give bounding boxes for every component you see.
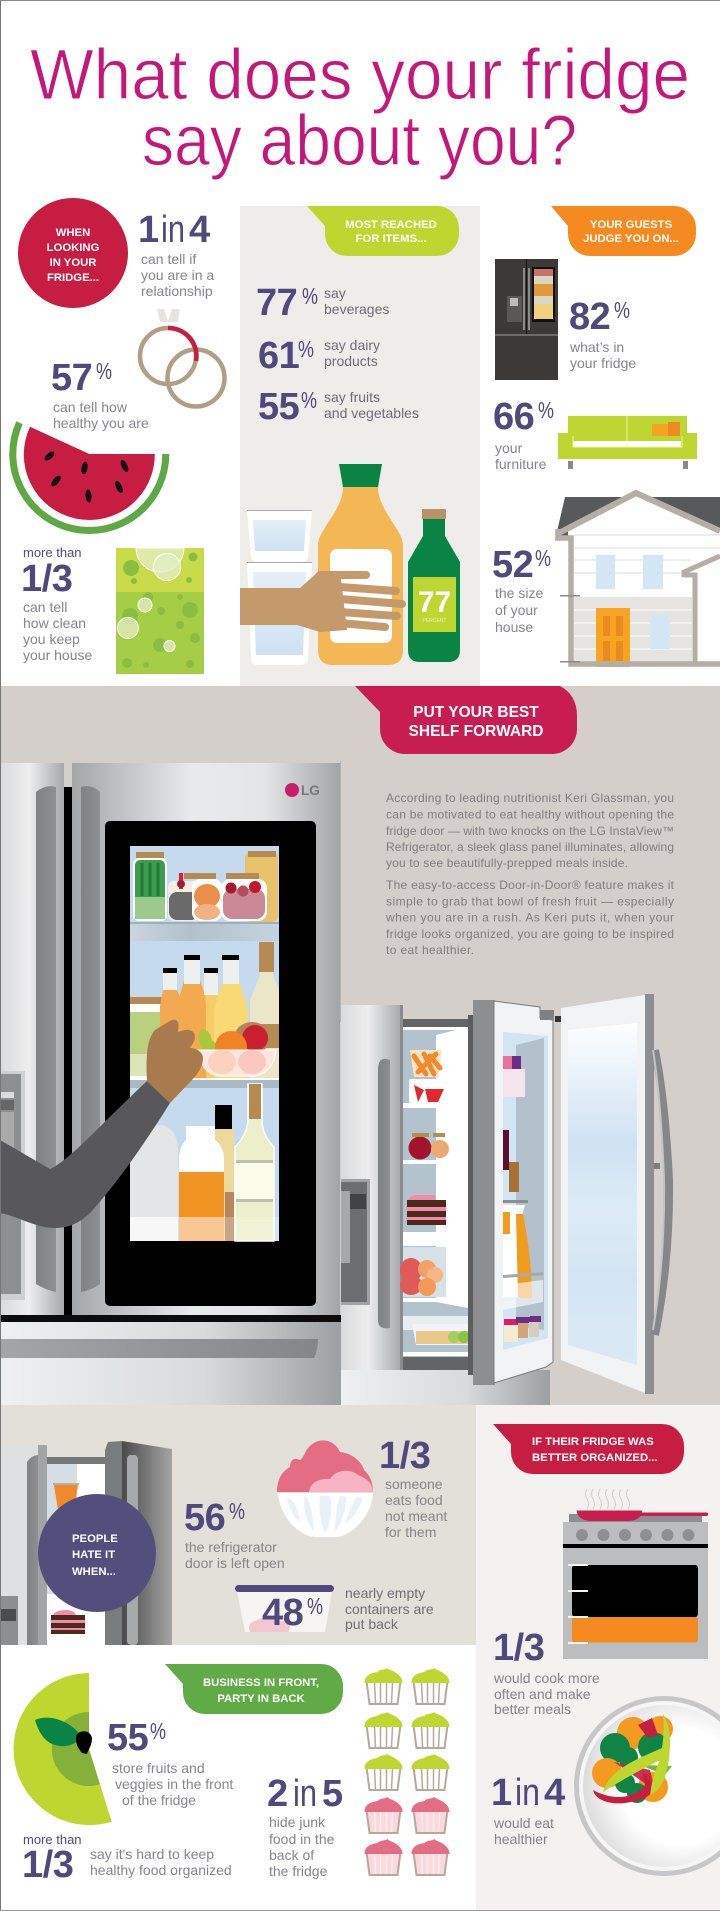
strawberries bbox=[409, 1079, 445, 1103]
arm in grey sleeve bbox=[0, 1081, 170, 1228]
top shelf jars bbox=[133, 851, 278, 922]
stat: 77% beverages: beverages bbox=[324, 301, 389, 317]
text block: nutritionist description: simple to grab that bowl of fresh fruit — especially bbox=[386, 894, 674, 908]
lower drawer bbox=[0, 1315, 550, 1405]
stat: 57% healthy: 57 bbox=[51, 357, 92, 399]
stat: 82% what's in your fridge: % bbox=[614, 297, 630, 323]
icon: green bottle with 77 percent: PERCENT bbox=[423, 618, 446, 624]
icon: green bottle with 77 percent: 77 bbox=[418, 586, 451, 619]
stat: 1 in 4 relationship: can tell if bbox=[141, 251, 196, 267]
stat: 1 in 4 relationship bbox=[138, 209, 214, 299]
callout: people hate it when: HATE IT bbox=[72, 1549, 115, 1561]
stat: 52% size of your house: house bbox=[495, 619, 533, 635]
stat: 56% door left open: the refrigerator bbox=[185, 1539, 277, 1555]
LG logo: LG bbox=[301, 783, 320, 798]
stat: 55% fruits and veggies: 55 bbox=[107, 1717, 149, 1759]
stat: more than 1/3 clean: can tell bbox=[23, 599, 67, 615]
shelves bbox=[403, 1103, 468, 1356]
apples and oranges bbox=[403, 1247, 446, 1297]
bottom shelf bottles bbox=[130, 1084, 274, 1241]
icon: cupcakes bbox=[364, 1668, 450, 1875]
stat: 1 in 4 relationship: in bbox=[161, 209, 185, 251]
stat: more than 1/3 hard to keep: more than bbox=[23, 1832, 82, 1847]
callout: when looking in your fridge: LOOKING bbox=[47, 242, 100, 254]
dispenser bbox=[341, 1179, 370, 1305]
stat: 52% size of your house: the size bbox=[495, 585, 543, 601]
badge: put your best shelf forward: SHELF FORWARD bbox=[409, 723, 543, 740]
cake bbox=[51, 1610, 85, 1634]
stat: 1/3 cook more: better meals bbox=[494, 1701, 571, 1717]
stat: 61% dairy: 61 bbox=[258, 335, 300, 377]
fridge window bbox=[105, 821, 316, 1306]
jars bbox=[408, 1136, 432, 1160]
stat: 55% fruits and veggies: veggies in the front bbox=[115, 1776, 233, 1792]
reaching hand bbox=[147, 1020, 203, 1103]
stat: 52% size of your house: of your bbox=[495, 602, 538, 618]
bottom drawer bbox=[412, 1324, 468, 1345]
text: nearly empty containers: put back bbox=[345, 1616, 399, 1632]
icon: nearly empty container with 48% bbox=[235, 1585, 334, 1634]
text block: nutritionist description: fridge door — with two knocks on the LG InstaView™ bbox=[386, 824, 674, 838]
badge: your guests judge you on: JUDGE YOU ON... bbox=[583, 233, 679, 245]
text block: nutritionist description: The easy-to-access Door-in-Door® feature makes it bbox=[386, 878, 675, 892]
badge: if their fridge was better organized bbox=[493, 1424, 684, 1474]
stat: 55% fruits: % bbox=[301, 387, 317, 413]
stat: 1/3 eats food bbox=[379, 1435, 447, 1540]
callout: when looking in your fridge: WHEN bbox=[56, 227, 90, 239]
text: nearly empty containers: nearly empty bbox=[345, 1585, 425, 1601]
stat: 1 in 4 eat healthier: 1 bbox=[491, 1772, 512, 1814]
icon: soapy sponge bbox=[116, 548, 204, 674]
stat: more than 1/3 clean: your house bbox=[23, 647, 92, 663]
text block: nutritionist description: According to leading nutritionist Keri Glassman, you bbox=[386, 791, 674, 805]
title: What does your fridge bbox=[30, 36, 690, 115]
stat: 1/3 cook more: 1/3 bbox=[493, 1627, 544, 1669]
badge: business in front party in back: PARTY IN BACK bbox=[217, 1693, 306, 1705]
icon: watermelon bbox=[13, 423, 166, 531]
illustration: small open fridge bbox=[0, 1441, 172, 1645]
stat: 77% beverages: 77 bbox=[256, 282, 297, 324]
title bbox=[30, 36, 690, 181]
badge: most reached for items: FOR ITEMS... bbox=[356, 233, 426, 245]
stat: 1 in 4 relationship: 4 bbox=[189, 209, 210, 251]
icon: sofa bbox=[558, 416, 697, 469]
stat: more than 1/3 hard to keep: 1/3 bbox=[22, 1844, 73, 1886]
badge: business in front party in back: BUSINESS IN FRONT, bbox=[203, 1677, 319, 1689]
stat: 1 in 4 relationship: 1 bbox=[138, 209, 159, 251]
stat: 55% fruits and veggies: % bbox=[150, 1718, 166, 1744]
callout: people hate it when: PEOPLE bbox=[72, 1533, 118, 1545]
stat: 77% beverages: % bbox=[302, 283, 318, 309]
text block: nutritionist description: Refrigerator, a sleek glass panel illuminates, allowing bbox=[386, 840, 674, 854]
stat: more than 1/3 hard to keep bbox=[22, 1832, 232, 1886]
stat: 61% dairy: products bbox=[324, 353, 378, 369]
stat: 2 in 5 hide junk food: in bbox=[293, 1773, 317, 1815]
badge: your guests judge you on bbox=[551, 206, 696, 256]
stat: more than 1/3 clean: you keep bbox=[23, 631, 80, 647]
title: say about you? bbox=[142, 102, 577, 181]
callout: when looking in your fridge: FRIDGE... bbox=[47, 272, 99, 284]
stat: 55% fruits bbox=[258, 386, 419, 428]
stat: 1/3 cook more: often and make bbox=[494, 1686, 591, 1702]
text: nearly empty containers: containers are bbox=[345, 1601, 434, 1617]
icon: rings bbox=[140, 309, 224, 406]
text block: nutritionist description: to eat healthier. bbox=[386, 943, 474, 957]
callout: people hate it when: WHEN... bbox=[72, 1566, 116, 1578]
stat: 57% healthy: % bbox=[96, 358, 112, 384]
stat: 56% door left open: % bbox=[229, 1498, 245, 1524]
text block: nutritionist description: fridge looks organized, you are going to be inspired bbox=[386, 927, 674, 941]
stat: 56% door left open: 56 bbox=[184, 1497, 225, 1539]
stat: 66% your furniture: % bbox=[538, 397, 554, 423]
stat: more than 1/3 clean: how clean bbox=[23, 615, 86, 631]
stat: 1/3 eats food: someone bbox=[385, 1476, 443, 1492]
text block: nutritionist description: when you are in a rush. As Keri puts it, when your bbox=[385, 910, 674, 924]
stat: 1 in 4 relationship: relationship bbox=[141, 283, 213, 299]
stat: 2 in 5 hide junk food: the fridge bbox=[269, 1863, 328, 1879]
stat: 66% your furniture bbox=[493, 396, 554, 472]
stat: 1/3 cook more bbox=[493, 1627, 600, 1717]
carrots bbox=[410, 1050, 442, 1077]
badge: if their fridge was better organized: BETTER ORGANIZED... bbox=[532, 1452, 658, 1464]
stat: 2 in 5 hide junk food: 5 bbox=[322, 1773, 343, 1815]
text: nearly empty containers bbox=[345, 1585, 434, 1632]
icon: stacked glasses bbox=[247, 510, 312, 665]
stat: 2 in 5 hide junk food: 2 bbox=[267, 1773, 288, 1815]
stat: 82% what's in your fridge: what’s in bbox=[569, 339, 624, 355]
stat: 55% fruits: 55 bbox=[258, 386, 300, 428]
interior bbox=[400, 1019, 473, 1370]
icon: black stainless fridge bbox=[495, 259, 558, 380]
stat: more than 1/3 hard to keep: say it's hard to keep bbox=[90, 1846, 214, 1862]
badge: most reached for items bbox=[307, 206, 459, 256]
stat: 57% healthy: can tell how bbox=[53, 399, 128, 415]
stat: 52% size of your house bbox=[492, 544, 551, 635]
stat: 66% your furniture: your bbox=[495, 440, 523, 456]
stat: 1 in 4 relationship: you are in a bbox=[141, 267, 214, 283]
stat: 1/3 eats food: not meant bbox=[385, 1508, 447, 1524]
stat: 1/3 eats food: for them bbox=[385, 1524, 436, 1540]
stat: 56% door left open: door is left open bbox=[185, 1555, 285, 1571]
text block: nutritionist description: can be motivated to eat healthy without opening the bbox=[386, 808, 674, 822]
stat: 2 in 5 hide junk food: food in the bbox=[269, 1831, 335, 1847]
stat: 77% beverages bbox=[256, 282, 389, 324]
badge: your guests judge you on: YOUR GUESTS bbox=[590, 219, 673, 231]
icon: green bottle with 77 percent bbox=[408, 509, 460, 662]
stat: 57% healthy: healthy you are bbox=[53, 415, 149, 431]
stat: 56% door left open bbox=[184, 1497, 285, 1571]
badge: put your best shelf forward bbox=[355, 686, 577, 754]
badge: most reached for items: MOST REACHED bbox=[345, 219, 437, 231]
icon: plate of vegetables bbox=[574, 1696, 720, 1876]
layer cake bbox=[407, 1195, 435, 1205]
badge: put your best shelf forward: PUT YOUR BEST bbox=[413, 704, 539, 721]
stat: 66% your furniture: furniture bbox=[495, 456, 547, 472]
water dispenser bbox=[0, 1071, 25, 1300]
stat: 55% fruits and veggies: of the fridge bbox=[122, 1792, 196, 1808]
text block: nutritionist description bbox=[385, 791, 675, 957]
shelf bbox=[130, 922, 279, 924]
icon: nearly empty container with 48%: 48 bbox=[262, 1592, 303, 1634]
stat: 52% size of your house: % bbox=[535, 545, 551, 571]
stat: 1/3 eats food: eats food bbox=[385, 1492, 443, 1508]
icon: juice bottle bbox=[318, 464, 403, 665]
panel: people hate it when bbox=[0, 1405, 476, 1645]
icon: half apple bbox=[14, 1673, 112, 1825]
door bins bbox=[503, 1056, 543, 1342]
stat: 55% fruits: and vegetables bbox=[324, 405, 419, 421]
stat: 1/3 eats food: 1/3 bbox=[379, 1435, 430, 1477]
stat: 77% beverages: say bbox=[324, 285, 346, 301]
stat: 61% dairy: % bbox=[298, 336, 314, 362]
stat: more than 1/3 clean: 1/3 bbox=[21, 558, 72, 600]
stat: 1 in 4 eat healthier: in bbox=[515, 1772, 540, 1814]
text block: nutritionist description: you to see beautifully-prepped meals inside. bbox=[386, 856, 628, 870]
icon: reaching hand bbox=[240, 571, 402, 632]
badge: if their fridge was better organized: IF THEIR FRIDGE WAS bbox=[532, 1436, 654, 1448]
panel: your guests judge you on bbox=[492, 206, 720, 667]
stat: 2 in 5 hide junk food: hide junk bbox=[269, 1814, 326, 1830]
door handle bbox=[655, 1050, 669, 1335]
panel: most reached for items bbox=[240, 206, 480, 686]
callout: when looking in your fridge: IN YOUR bbox=[50, 257, 96, 269]
stat: 52% size of your house: 52 bbox=[492, 544, 533, 586]
panel: business in front party in back bbox=[14, 1664, 450, 1886]
door two bbox=[561, 994, 669, 1394]
middle shelf bottles bbox=[130, 942, 279, 1078]
illustration: closed InstaView fridge bbox=[0, 761, 550, 1405]
stat: more than 1/3 hard to keep: healthy food organized bbox=[90, 1862, 232, 1878]
door one bbox=[468, 1000, 561, 1385]
callout: people hate it when bbox=[38, 1494, 156, 1612]
stat: 55% fruits: say fruits bbox=[324, 389, 380, 405]
handles bbox=[36, 786, 100, 1292]
stat: 66% your furniture: 66 bbox=[493, 396, 534, 438]
stat: 57% healthy bbox=[51, 357, 149, 431]
stat: more than 1/3 clean bbox=[21, 545, 92, 663]
icon: bowl of ice cream with bite bbox=[277, 1440, 373, 1537]
LG logo bbox=[285, 783, 320, 798]
panel: if their fridge was better organized bbox=[476, 1405, 720, 1910]
stat: 82% what's in your fridge bbox=[569, 296, 636, 371]
stat: 2 in 5 hide junk food: back of bbox=[269, 1847, 314, 1863]
panel: when looking in your fridge bbox=[13, 198, 225, 674]
stat: 55% fruits and veggies bbox=[107, 1717, 233, 1808]
panel: put your best shelf forward bbox=[0, 686, 720, 1405]
icon: house bbox=[555, 493, 720, 667]
stat: 1/3 cook more: would cook more bbox=[493, 1670, 600, 1686]
stat: 1 in 4 eat healthier: would eat bbox=[493, 1815, 554, 1831]
stat: 1 in 4 eat healthier bbox=[491, 1772, 565, 1847]
icon: nearly empty container with 48%: % bbox=[307, 1593, 323, 1619]
icon: stove with pan bbox=[563, 1489, 708, 1659]
illustration: open fridge bbox=[341, 994, 669, 1394]
stat: 1 in 4 eat healthier: 4 bbox=[544, 1772, 565, 1814]
stat: 55% fruits and veggies: store fruits and bbox=[112, 1760, 205, 1776]
stat: 61% dairy: say dairy bbox=[324, 337, 380, 353]
stat: 2 in 5 hide junk food bbox=[267, 1773, 343, 1879]
stat: 61% dairy bbox=[258, 335, 380, 377]
callout: when looking in your fridge bbox=[18, 198, 128, 308]
stat: 82% what's in your fridge: your fridge bbox=[570, 355, 636, 371]
stat: 82% what's in your fridge: 82 bbox=[569, 296, 610, 338]
stat: more than 1/3 clean: more than bbox=[23, 545, 82, 560]
badge: business in front party in back bbox=[165, 1664, 343, 1714]
stat: 1 in 4 eat healthier: healthier bbox=[494, 1831, 548, 1847]
shelf bbox=[130, 1078, 279, 1080]
